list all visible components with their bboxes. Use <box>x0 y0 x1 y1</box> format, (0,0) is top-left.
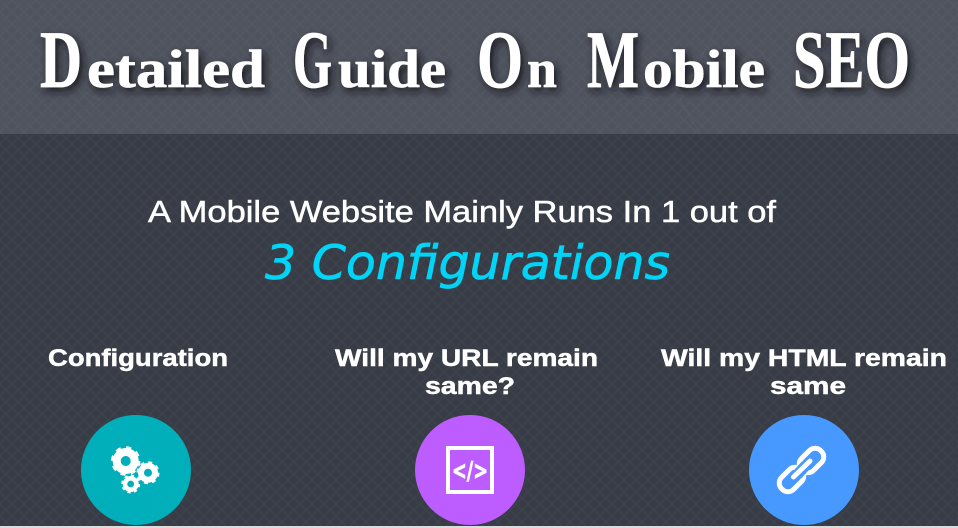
icon: code <box>415 415 525 525</box>
title: obile <box>643 39 765 99</box>
icon: gears <box>81 415 191 525</box>
panel: body background <box>0 134 958 528</box>
title <box>40 14 910 105</box>
title: D <box>40 14 82 105</box>
column heading: url: Will my URL remain <box>335 345 598 372</box>
column heading: html <box>661 345 947 400</box>
panel: header background <box>0 0 958 134</box>
column heading: url <box>335 345 598 400</box>
title: G <box>293 14 332 105</box>
subtitle: A Mobile Website Mainly Runs In 1 out of <box>148 194 776 229</box>
column heading: configuration: Configuration <box>48 345 228 372</box>
title: SEO <box>793 14 910 105</box>
title: n <box>527 39 557 99</box>
column heading: html: same <box>770 373 846 400</box>
icon: code: </> <box>452 456 488 485</box>
title: uide <box>338 39 446 99</box>
column heading: html: Will my HTML remain <box>661 345 947 372</box>
column heading: url: same? <box>425 373 515 400</box>
title: M <box>587 14 639 105</box>
icon: link <box>749 415 859 525</box>
title: etailed <box>87 39 265 99</box>
highlighted heading: 3 Configurations <box>265 236 670 291</box>
title: O <box>477 14 523 105</box>
